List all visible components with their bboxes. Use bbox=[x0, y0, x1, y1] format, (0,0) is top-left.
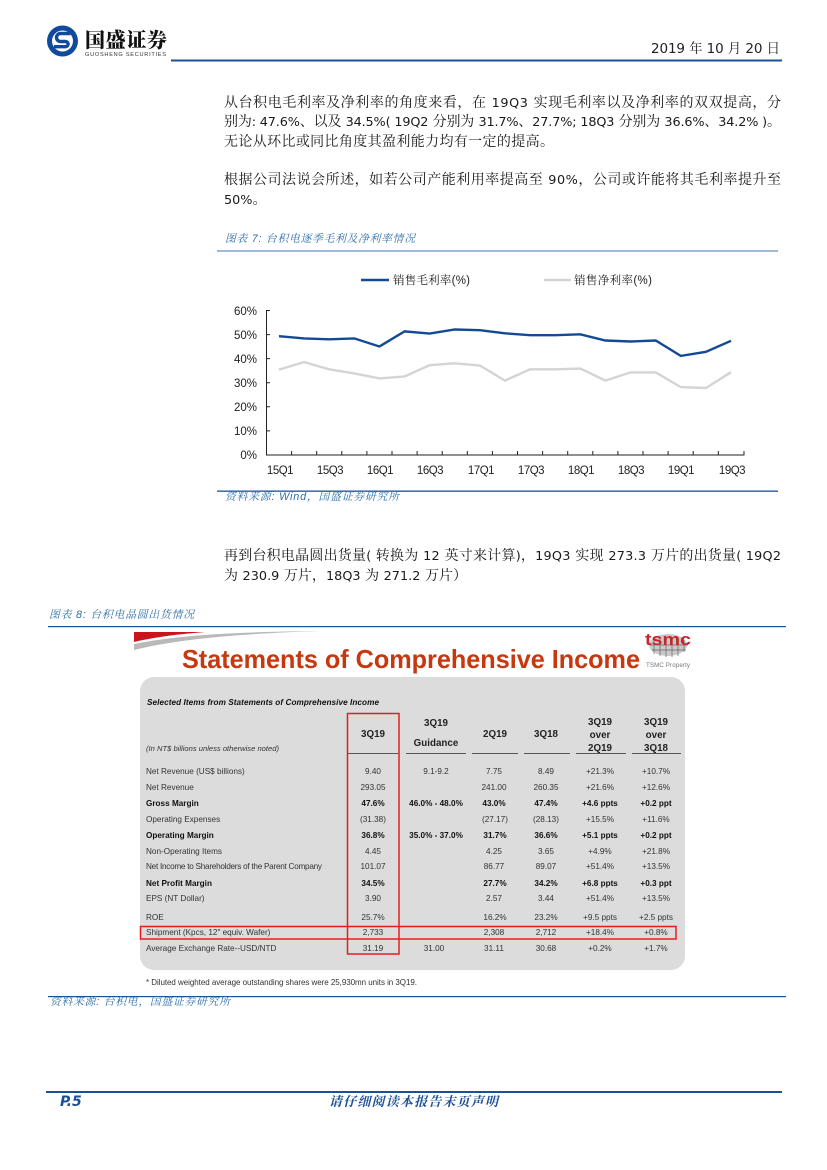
legend: 销售净利率(%) bbox=[574, 273, 652, 287]
company english name: GUOSHENG SECURITIES bbox=[85, 52, 166, 58]
table values: over 3Q18 bbox=[639, 767, 673, 953]
table values: guidance: 46.0% - 48.0% bbox=[409, 799, 464, 808]
table values: guidance: 35.0% - 37.0% bbox=[409, 831, 464, 840]
table values: 3Q18: 89.07 bbox=[536, 862, 557, 871]
text block: margins: 无论从环比或同比角度其盈利能力均有一定的提高。 bbox=[224, 133, 554, 150]
row labels: Operating Margin bbox=[146, 831, 214, 840]
table values: guidance bbox=[409, 767, 464, 953]
footnote: * Diluted weighted average outstanding shares were 25,930mn units in 3Q19. bbox=[146, 978, 417, 987]
table panel bbox=[140, 677, 685, 970]
y axis labels: 50% bbox=[234, 330, 257, 342]
table values: 3Q18: 260.35 bbox=[533, 783, 559, 792]
y axis labels: 40% bbox=[234, 354, 257, 366]
table note: (In NT$ billions unless otherwise noted) bbox=[146, 744, 279, 753]
x axis labels: 17Q3 bbox=[518, 465, 544, 477]
text block: capacity utilisation bbox=[224, 171, 781, 208]
table header: 3Q18 bbox=[534, 729, 559, 740]
table values: over 2Q19: +15.5% bbox=[586, 815, 614, 824]
table header: 3Q19 bbox=[361, 729, 386, 740]
table values: over 2Q19: +4.6 ppts bbox=[582, 799, 618, 808]
table values: over 2Q19: +5.1 ppts bbox=[582, 831, 618, 840]
y axis labels bbox=[234, 306, 257, 462]
heading: figure 7: 图表 7: 台积电逐季毛利及净利率情况 bbox=[225, 232, 417, 245]
line chart: margins bbox=[234, 273, 745, 477]
text block: wafer shipments: 再到台积电晶圆出货量( 转换为 12 英寸来计算)，19Q3 实现 273.3 万片的出货量( 19Q2 bbox=[224, 547, 781, 564]
table values: over 3Q18: +13.5% bbox=[642, 894, 670, 903]
row labels: Non-Operating Items bbox=[146, 847, 222, 856]
icon: Guosheng logo bbox=[47, 26, 78, 56]
table values: over 2Q19: +6.8 ppts bbox=[582, 879, 618, 888]
table values: 3Q19: 9.40 bbox=[365, 767, 381, 776]
table values: over 2Q19: +51.4% bbox=[586, 862, 614, 871]
table values: guidance: 31.00 bbox=[424, 944, 445, 953]
table values: 3Q18: 23.2% bbox=[534, 913, 558, 922]
table values: 2Q19: 16.2% bbox=[483, 913, 507, 922]
heading: figure 8: 图表 8: 台积电晶圆出货情况 bbox=[49, 608, 196, 621]
table values: over 3Q18: +2.5 ppts bbox=[639, 913, 673, 922]
table header bbox=[347, 717, 681, 754]
table values: 3Q19: (31.38) bbox=[360, 815, 386, 824]
y axis labels: 10% bbox=[234, 426, 257, 438]
table values: 3Q19: 4.45 bbox=[365, 847, 381, 856]
table values: 3Q18: 8.49 bbox=[538, 767, 554, 776]
table values: 2Q19: 86.77 bbox=[484, 862, 505, 871]
source: figure 7: 资料来源: Wind，国盛证券研究所 bbox=[225, 490, 401, 503]
table values: over 3Q18: +0.2 ppt bbox=[640, 831, 672, 840]
series: gross margin bbox=[279, 330, 731, 356]
table header: 3Q19 bbox=[588, 717, 613, 728]
slide title: Statements of Comprehensive Income bbox=[182, 644, 640, 674]
x axis labels: 15Q3 bbox=[317, 465, 343, 477]
date: 2019 年 10 月 20 日 bbox=[651, 40, 780, 57]
header bbox=[47, 24, 782, 62]
table values: over 2Q19: +21.3% bbox=[586, 767, 614, 776]
table values: over 2Q19: +9.5 ppts bbox=[583, 913, 617, 922]
company name: 国盛证券 bbox=[85, 24, 167, 53]
table header: 2Q19 bbox=[483, 729, 508, 740]
table values: 2Q19: 7.75 bbox=[486, 767, 502, 776]
table values: over 2Q19: +18.4% bbox=[586, 928, 614, 937]
table values: 2Q19: 4.25 bbox=[486, 847, 502, 856]
table values: 3Q19: 47.6% bbox=[361, 799, 385, 808]
table header: over bbox=[590, 730, 611, 741]
swoosh bbox=[134, 631, 320, 650]
icon: tsmc logo: TSMC Property bbox=[646, 662, 691, 669]
row labels: Net Profit Margin bbox=[146, 879, 212, 888]
text block: margins: 从台积电毛利率及净利率的角度来看，在 19Q3 实现毛利率以及净利率的双双提高，分 bbox=[224, 94, 781, 111]
x axis labels: 16Q3 bbox=[417, 465, 443, 477]
table values: over 2Q19: +51.4% bbox=[586, 894, 614, 903]
x axis labels: 16Q1 bbox=[367, 465, 393, 477]
table values: over 2Q19: +21.6% bbox=[586, 783, 614, 792]
table values: over 3Q18: +1.7% bbox=[644, 944, 668, 953]
table values: 3Q18: 34.2% bbox=[534, 879, 558, 888]
row labels: Average Exchange Rate--USD/NTD bbox=[146, 944, 277, 953]
y axis labels: 0% bbox=[240, 450, 257, 462]
table values: over 3Q18: +0.8% bbox=[644, 928, 668, 937]
table values: 3Q19: 36.8% bbox=[361, 831, 385, 840]
table values: over 3Q18: +10.7% bbox=[642, 767, 670, 776]
table values: 2Q19: 31.11 bbox=[484, 944, 504, 953]
table values: 2Q19: 2.57 bbox=[486, 894, 502, 903]
table values: 2Q19: 43.0% bbox=[482, 799, 506, 808]
table header: 3Q18 bbox=[644, 743, 669, 754]
table values: 3Q19: 2,733 bbox=[363, 928, 384, 937]
table values: 3Q18: 2,712 bbox=[536, 928, 557, 937]
y axis labels: 20% bbox=[234, 402, 257, 414]
disclaimer: 请仔细阅读本报告末页声明 bbox=[329, 1094, 500, 1109]
row labels: Shipment (Kpcs, 12" equiv. Wafer) bbox=[146, 928, 271, 937]
text block: capacity utilisation: 根据公司法说会所述，如若公司产能利用率提高至 90%，公司或许能将其毛利率提升至 bbox=[224, 171, 781, 188]
table values: 3Q19: 31.19 bbox=[363, 944, 384, 953]
table header: Guidance bbox=[414, 738, 459, 749]
table values: 3Q18: 36.6% bbox=[534, 831, 558, 840]
slide: statements of comprehensive income bbox=[134, 630, 691, 987]
table values: 3Q19: 101.07 bbox=[360, 862, 386, 871]
row labels: EPS (NT Dollar) bbox=[146, 894, 205, 903]
table values: over 3Q18: +0.2 ppt bbox=[640, 799, 672, 808]
table values: over 3Q18: +12.6% bbox=[642, 783, 670, 792]
table header: over bbox=[646, 730, 667, 741]
table values: over 2Q19: +0.2% bbox=[588, 944, 612, 953]
table values: 3Q19 bbox=[360, 767, 386, 953]
x axis labels: 19Q3 bbox=[719, 465, 745, 477]
series: net margin bbox=[279, 362, 731, 388]
table values: 3Q19: 34.5% bbox=[361, 879, 385, 888]
row labels: Net Income to Shareholders of the Parent Company bbox=[146, 862, 323, 871]
icon: tsmc logo bbox=[645, 630, 691, 669]
text block: margins: 别为: 47.6%、以及 34.5%( 19Q2 分别为 31.7%、27.7%; 18Q3 分别为 36.6%、34.2% )。 bbox=[224, 113, 781, 130]
table values: 3Q18 bbox=[533, 767, 559, 953]
table values: over 3Q18: +0.3 ppt bbox=[640, 879, 672, 888]
text block: wafer shipments bbox=[224, 547, 781, 584]
x axis labels: 15Q1 bbox=[267, 465, 293, 477]
highlight: shipment row bbox=[140, 926, 676, 939]
text block: margins bbox=[224, 94, 781, 150]
table title: Selected Items from Statements of Comprehensive Income bbox=[147, 698, 379, 707]
table values: 2Q19: 241.00 bbox=[481, 783, 507, 792]
table values: over 3Q18: +13.5% bbox=[642, 862, 670, 871]
table values: over 3Q18: +11.6% bbox=[642, 815, 670, 824]
row labels: Net Revenue bbox=[146, 783, 194, 792]
text block: wafer shipments: 为 230.9 万片，18Q3 为 271.2 万片） bbox=[224, 567, 467, 584]
table values: 3Q18: 30.68 bbox=[536, 944, 557, 953]
row labels bbox=[146, 767, 323, 953]
table values: 3Q18: 3.44 bbox=[538, 894, 554, 903]
source: figure 8: 资料来源: 台积电，国盛证券研究所 bbox=[50, 995, 232, 1008]
row labels: ROE bbox=[146, 913, 164, 922]
table values: 3Q19: 293.05 bbox=[360, 783, 386, 792]
table values: 3Q18: 3.65 bbox=[538, 847, 554, 856]
y axis labels: 30% bbox=[234, 378, 257, 390]
table values: 2Q19: 31.7% bbox=[483, 831, 507, 840]
axes bbox=[266, 310, 744, 455]
row labels: Operating Expenses bbox=[146, 815, 220, 824]
x axis labels: 19Q1 bbox=[668, 465, 694, 477]
legend bbox=[361, 273, 652, 287]
y axis labels: 60% bbox=[234, 306, 257, 318]
table values: 3Q19: 25.7% bbox=[361, 913, 385, 922]
table values: 2Q19: (27.17) bbox=[482, 815, 508, 824]
row labels: Gross Margin bbox=[146, 799, 199, 808]
x axis labels: 18Q1 bbox=[568, 465, 594, 477]
table values: over 2Q19: +4.9% bbox=[588, 847, 612, 856]
x axis labels: 17Q1 bbox=[468, 465, 494, 477]
legend: 销售毛利率(%) bbox=[393, 273, 470, 287]
table header: 3Q19 bbox=[424, 718, 449, 729]
highlight: 3Q19 column bbox=[348, 714, 399, 954]
page number: P.5 bbox=[60, 1094, 82, 1110]
table values: over 3Q18: +21.8% bbox=[642, 847, 670, 856]
table values: over 2Q19 bbox=[582, 767, 618, 953]
table values: 2Q19: 27.7% bbox=[483, 879, 507, 888]
table values: 2Q19: 2,308 bbox=[484, 928, 505, 937]
table values: 3Q18: (28.13) bbox=[533, 815, 559, 824]
x axis labels: 18Q3 bbox=[618, 465, 644, 477]
text block: capacity utilisation: 50%。 bbox=[224, 192, 266, 208]
table header: 2Q19 bbox=[588, 743, 613, 754]
row labels: Net Revenue (US$ billions) bbox=[146, 767, 245, 776]
table values: 2Q19 bbox=[481, 767, 508, 953]
table header: 3Q19 bbox=[644, 717, 669, 728]
table values: 3Q18: 47.4% bbox=[534, 799, 558, 808]
x axis labels bbox=[267, 465, 745, 477]
table values: guidance: 9.1-9.2 bbox=[423, 767, 449, 776]
table values: 3Q19: 3.90 bbox=[365, 894, 381, 903]
icon: tsmc logo: tsmc bbox=[645, 630, 691, 649]
footer bbox=[46, 1091, 782, 1110]
